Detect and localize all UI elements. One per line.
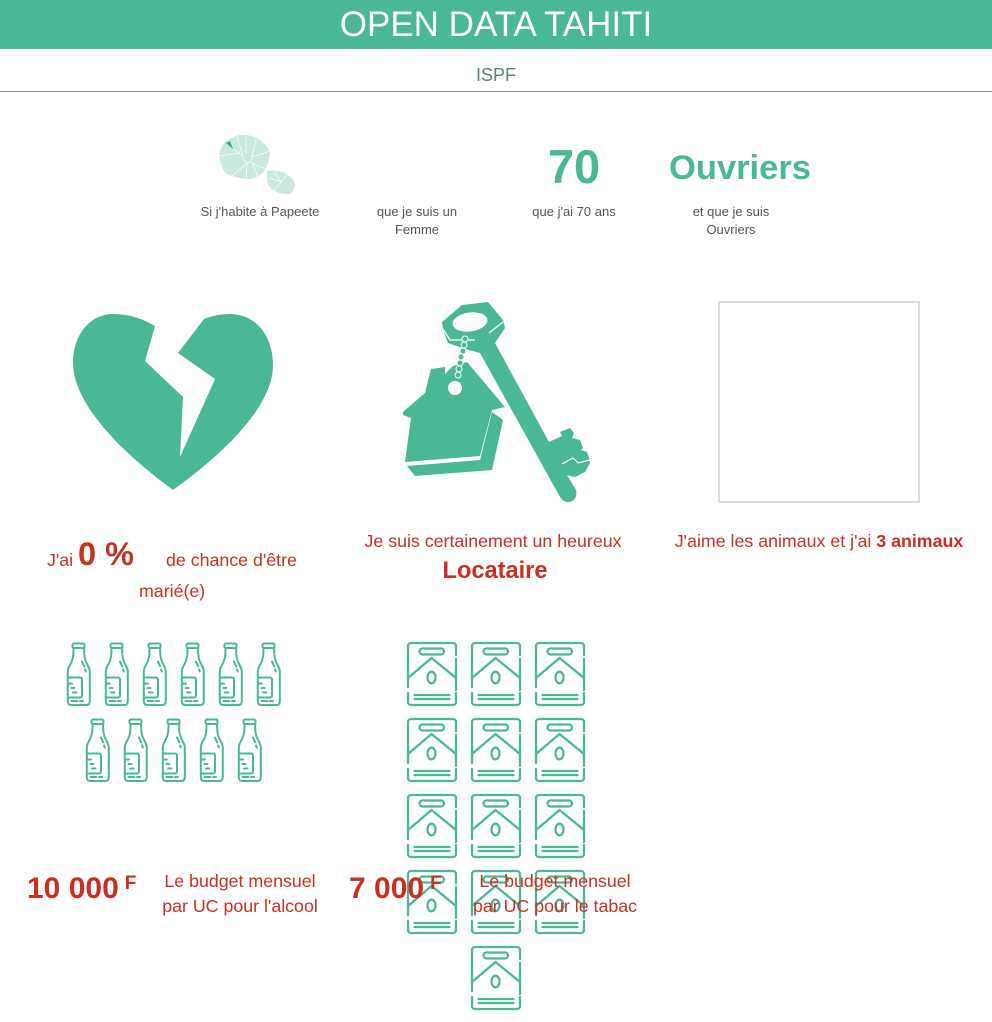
- marital status text: marié(e): [139, 581, 205, 601]
- housing text: Je suis certainement un heureux: [364, 531, 622, 551]
- profile text: occupation: [693, 204, 769, 237]
- animals text: J'aime les animaux et j'ai 3 animaux: [675, 531, 963, 551]
- profile text: age: que j'ai 70 ans: [532, 204, 616, 219]
- empty image frame for animals: [718, 301, 920, 503]
- pictogram: bottles: [68, 644, 280, 781]
- icon: map of Tahiti: [219, 135, 295, 194]
- tobacco label: [473, 871, 637, 916]
- marital status text: J'ai: [47, 550, 73, 570]
- pictogram: cigarette packs: [408, 643, 584, 1009]
- profile text: occupation: et que je suis: [693, 204, 769, 219]
- tobacco label: Le budget mensuel: [479, 871, 631, 891]
- alcohol label: par UC pour l'alcool: [162, 896, 318, 916]
- profile text: location: Si j'habite à Papeete: [201, 204, 319, 219]
- big word: occupation: Ouvriers: [669, 149, 811, 187]
- icon: broken heart: [73, 314, 273, 490]
- alcohol amount: 10 000 F: [27, 872, 136, 905]
- profile text: occupation: Ouvriers: [706, 222, 756, 237]
- housing status: Locataire: [443, 558, 547, 584]
- header bar title: [0, 0, 992, 49]
- marital status text: [47, 536, 297, 601]
- icon: house key: [403, 302, 590, 502]
- subtitle: ISPF: [476, 65, 516, 85]
- big number: age: 70: [548, 140, 600, 193]
- profile text: gender: que je suis un: [377, 204, 457, 219]
- alcohol label: [162, 871, 318, 916]
- profile text: gender: Femme: [395, 222, 439, 237]
- header bar title: OPEN DATA TAHITI: [340, 5, 652, 44]
- tobacco amount: 7 000 F: [349, 872, 442, 905]
- marital status text: 0 %: [78, 536, 134, 572]
- tobacco label: par UC pour le tabac: [473, 896, 637, 916]
- profile text: gender: [377, 204, 457, 237]
- subtitle: [0, 50, 992, 92]
- marital status text: de chance d'être: [166, 550, 297, 570]
- alcohol label: Le budget mensuel: [164, 871, 316, 891]
